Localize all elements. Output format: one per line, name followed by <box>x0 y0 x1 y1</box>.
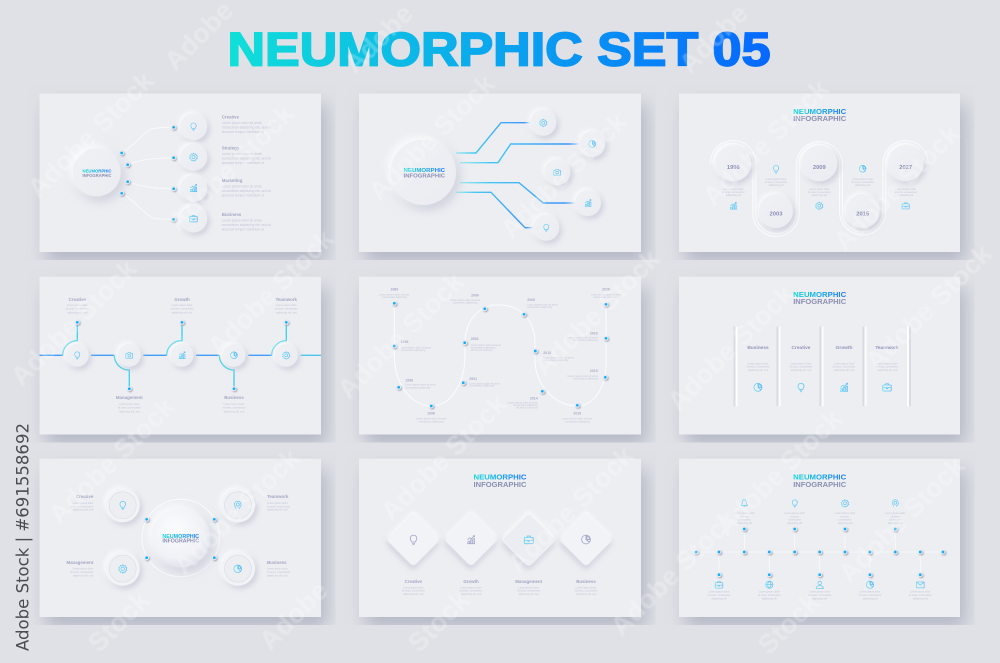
connector lines <box>122 127 174 219</box>
year labels: 1989 <box>390 288 398 292</box>
year circle 2009 <box>801 145 837 181</box>
year labels: Lorem ipsum dolor sit amet <box>568 375 598 378</box>
year labels: 2026 <box>602 288 610 292</box>
top captions: adipiscing elit <box>837 522 853 525</box>
captions and icons: adipiscing elit <box>812 194 827 197</box>
text: Creative <box>70 494 94 512</box>
year labels: Lorem ipsum dolor sit amet <box>591 293 621 296</box>
captions and icons: Lorem ipsum dolor <box>723 188 744 191</box>
column: Growth: adipiscing elit, sed <box>834 369 855 372</box>
text: Management: Lorem ipsum dolor <box>73 568 93 571</box>
text: Management: sit amet, consectetur <box>70 571 93 574</box>
text: Business: Business <box>224 395 244 400</box>
text: Management: adipiscing elit, sed <box>73 575 94 578</box>
year circle 2015 <box>846 194 880 228</box>
bottom captions: sit amet, consectetur <box>758 594 781 597</box>
bottom captions: sit amet, consectetur <box>858 594 882 597</box>
year labels: Lorem ipsum dolor sit amet <box>450 299 480 302</box>
text: Business: consectetur adipiscing elit, sed do <box>222 223 271 227</box>
icon circles <box>180 113 207 232</box>
timeline line <box>40 322 321 389</box>
year labels: 2019 <box>590 369 598 373</box>
text: Teamwork: adipiscing elit, sed <box>276 311 297 314</box>
icon circles <box>66 344 298 367</box>
year labels: 2006 <box>527 298 535 302</box>
year labels: consectetur adipiscing <box>594 296 619 299</box>
captions and icons: sit amet, consectetur <box>851 181 874 184</box>
top captions: sit amet, <box>891 515 900 518</box>
year labels: 2003 <box>471 337 479 341</box>
year circle 2027: 2027 <box>899 165 912 171</box>
text: Teamwork <box>275 297 298 314</box>
year circle 2015: 2015 <box>856 211 870 217</box>
column: Growth <box>832 345 856 391</box>
text: Creative: Creative <box>76 494 94 499</box>
top captions: Lorem ipsum dolor <box>835 512 856 515</box>
central circle: INFOGRAPHIC <box>82 173 112 178</box>
panel heading: NEUMORPHIC <box>474 473 527 482</box>
text: Business: Business <box>267 560 287 565</box>
bottom captions <box>707 591 932 600</box>
bottom icons <box>715 581 924 589</box>
text: Creative: sit amet, consectetur <box>66 308 89 311</box>
text: Growth: Lorem ipsum dolor <box>172 304 193 307</box>
text: Creative: consectetur adipiscing elit, sed do <box>222 126 271 130</box>
watermarks: Adobe Stock <box>697 73 835 212</box>
text: Strategy: eiusmod tempor incididunt ut <box>222 161 264 165</box>
panel heading: INFOGRAPHIC <box>474 480 527 489</box>
column: Growth: Lorem ipsum dolor <box>834 362 855 365</box>
bottom captions: sit amet, consectetur <box>808 594 831 597</box>
year labels: 2019 <box>590 332 598 336</box>
text: Teamwork: sit amet, consectetur <box>267 505 290 508</box>
path dots <box>392 301 608 408</box>
watermarks: Adobe <box>338 0 419 79</box>
watermarks: Adobe Stock <box>528 243 666 382</box>
diamond: Growth: adipiscing elit, sed <box>461 593 482 596</box>
panel heading: NEUMORPHIC <box>793 290 847 299</box>
text: Business: Lorem ipsum dolor sit amet, <box>222 218 262 222</box>
diamond: Business: Business <box>576 579 596 584</box>
watermarks: Adobe Stock <box>332 266 470 405</box>
text: Business <box>222 212 271 232</box>
year labels: 2000 <box>471 294 479 298</box>
column: Business: Lorem ipsum dolor <box>748 362 769 365</box>
text: Business: Lorem ipsum dolor <box>224 403 245 406</box>
panel: four diamonds <box>359 459 641 617</box>
end dots <box>75 320 289 391</box>
text: Strategy: Lorem ipsum dolor sit amet, <box>222 152 262 156</box>
watermarks: Adobe Stock <box>162 98 300 237</box>
text: Strategy: consectetur adipiscing elit, sed do <box>222 156 271 160</box>
captions and icons: adipiscing elit <box>855 184 871 187</box>
year labels: elit sed do eiusmod <box>471 349 493 352</box>
bottom captions: sit amet, consectetur <box>707 594 731 597</box>
central circle: INFOGRAPHIC <box>404 174 446 180</box>
captions and icons: adipiscing elit <box>898 194 914 197</box>
watermarks: Adobe Stock <box>662 278 800 417</box>
diamond: Business: sit amet, consectetur <box>574 590 598 593</box>
text: Teamwork: Lorem ipsum dolor <box>267 502 288 505</box>
top captions: adipiscing elit <box>737 522 752 525</box>
year labels: consectetur adipiscing <box>469 385 495 388</box>
wave track <box>712 142 927 235</box>
year labels: consectetur adipiscing <box>453 301 478 304</box>
text: Business <box>222 395 246 413</box>
year labels: consectetur adipiscing <box>419 420 444 423</box>
panel: horizontal timeline with arcs <box>40 277 321 434</box>
year labels: consectetur adipiscing <box>543 359 569 362</box>
diamond: Creative <box>386 513 440 596</box>
column: Creative: adipiscing elit, sed <box>791 369 812 372</box>
text: Business: Lorem ipsum dolor <box>267 568 288 571</box>
column: Teamwork: Lorem ipsum dolor <box>877 362 898 365</box>
diamond: Growth: sit amet, consectetur <box>459 590 483 593</box>
captions and icons: Lorem ipsum dolor <box>766 178 787 181</box>
top captions: sit amet, <box>740 515 749 518</box>
diamond: Growth: Lorem ipsum dolor <box>461 587 482 590</box>
year labels: Lorem ipsum dolor sit amet <box>471 344 501 347</box>
top captions: consectetur <box>738 519 751 522</box>
text: Management: adipiscing elit, sed <box>119 410 140 413</box>
year labels: elit sed do eiusmod <box>516 407 538 410</box>
diamond: Creative: sit amet, consectetur <box>402 590 425 593</box>
panel heading: INFOGRAPHIC <box>793 297 847 306</box>
text: Teamwork: sit amet, consectetur <box>275 308 298 311</box>
title: NEUMORPHIC SET 05 <box>228 22 770 76</box>
text: Marketing: eiusmod tempor incididunt ut <box>222 194 264 198</box>
text: Creative: Lorem ipsum dolor <box>67 304 88 307</box>
diamond: Management: adipiscing elit, sed <box>518 593 540 596</box>
diamond: Business: adipiscing elit, sed <box>576 593 597 596</box>
column: Teamwork: sit amet, consectetur <box>875 366 899 369</box>
column: Business <box>746 345 770 391</box>
diamond: Business: Lorem ipsum dolor <box>576 587 597 590</box>
watermarks: Adobe <box>253 575 334 656</box>
top captions: sit amet, <box>840 515 850 518</box>
central circle: NEUMORPHIC <box>404 168 446 174</box>
connector dots <box>119 125 176 222</box>
bottom captions: Lorem ipsum dolor <box>910 591 931 594</box>
panel: branching list with four circles <box>40 94 321 252</box>
year labels: 2016 <box>573 412 581 416</box>
central sphere and ring <box>142 499 219 577</box>
year labels: consectetur adipiscing <box>527 306 553 309</box>
central circle <box>391 140 456 205</box>
captions and icons: sit amet, consectetur <box>808 191 831 194</box>
text: Strategy <box>222 146 271 165</box>
column: Business: sit amet, consectetur <box>746 366 770 369</box>
text: Business <box>267 560 290 578</box>
circuit lines <box>456 123 580 228</box>
year labels: consectetur adipiscing <box>573 339 598 342</box>
text: Business: sit amet, consectetur <box>267 571 290 574</box>
year labels: consectetur adipiscing <box>405 386 431 389</box>
year labels: 1996 <box>405 378 413 382</box>
panel heading: INFOGRAPHIC <box>793 480 847 489</box>
diamond: Management: Management <box>515 579 543 584</box>
text: Business: eiusmod tempor incididunt ut <box>222 228 264 232</box>
text: Creative: adipiscing elit, sed <box>67 311 88 314</box>
central sphere and ring: NEUMORPHIC <box>162 534 199 540</box>
top captions: Lorem ipsum dolor <box>885 512 906 515</box>
top captions <box>734 512 906 525</box>
text: Business: adipiscing elit, sed <box>224 410 245 413</box>
bottom captions: Lorem ipsum dolor <box>860 591 881 594</box>
top icons <box>741 500 898 507</box>
captions and icons: sit amet, consectetur <box>894 191 917 194</box>
year circle 2003: 2003 <box>770 211 783 217</box>
year labels: Lorem ipsum dolor sit amet <box>568 337 598 340</box>
text: Growth: Growth <box>174 297 190 302</box>
text: Strategy: Strategy <box>222 146 240 150</box>
central circle: NEUMORPHIC <box>82 168 112 173</box>
watermarks: Adobe Stock <box>605 503 743 642</box>
diamond: Growth: Growth <box>463 579 479 584</box>
year labels: consectetur adipiscing <box>573 377 598 380</box>
year labels: 1998 <box>427 412 435 416</box>
diamond: Management: sit amet, consectetur <box>517 590 540 593</box>
text: Business: Business <box>222 212 242 217</box>
year labels: Lorem ipsum dolor sit amet <box>469 382 500 385</box>
text: Teamwork: Lorem ipsum dolor <box>276 304 297 307</box>
watermarks: Adobe Stock <box>22 65 160 204</box>
watermarks: Adobe Stock <box>5 253 143 392</box>
year labels: consectetur adipiscing <box>382 296 407 299</box>
column: Creative <box>789 345 813 392</box>
captions and icons: adipiscing elit <box>768 184 784 187</box>
year circle 1996 <box>715 145 751 181</box>
year circle 2009: 2009 <box>813 165 827 171</box>
panel heading: NEUMORPHIC <box>793 107 847 116</box>
watermarks: Adobe Stock <box>363 68 501 207</box>
watermarks: Adobe Stock <box>502 440 640 579</box>
watermarks: Adobe <box>673 0 754 79</box>
captions and icons: Lorem ipsum dolor <box>852 178 873 181</box>
timeline lines <box>696 529 943 575</box>
panel: serpentine timeline 1989-2026 <box>359 277 641 434</box>
text: Marketing: consectetur adipiscing elit, sed do <box>222 189 271 193</box>
captions and icons: adipiscing elit <box>726 194 741 197</box>
text: Management: Lorem ipsum dolor <box>119 403 140 406</box>
diamond: Business <box>559 513 613 596</box>
top captions: Lorem ipsum dolor <box>734 512 755 515</box>
serpentine path <box>394 303 606 406</box>
panel: wave timeline 1996-2027 <box>679 94 960 252</box>
year labels: 2014 <box>530 396 538 400</box>
year labels: consectetur adipiscing <box>401 349 426 352</box>
text: Marketing <box>222 178 271 198</box>
bottom captions: adipiscing elit <box>862 597 878 600</box>
panel heading <box>793 290 847 306</box>
captions and icons: Lorem ipsum dolor <box>895 188 916 191</box>
watermarks: Adobe Stock <box>202 223 340 362</box>
watermarks: Adobe Stock <box>375 388 513 527</box>
text: Creative: sit amet, consectetur <box>70 505 93 508</box>
year labels: Lorem ipsum dolor sit amet <box>401 346 431 349</box>
watermarks: Adobe Stock <box>860 238 998 377</box>
top captions: Lorem ipsum dolor <box>784 512 805 515</box>
captions and icons: Lorem ipsum dolor <box>809 188 830 191</box>
year labels: Lorem ipsum dolor sit amet <box>405 384 436 387</box>
bottom captions: Lorem ipsum dolor <box>809 591 830 594</box>
panel: dotted branching timeline <box>679 459 960 617</box>
column: Teamwork <box>875 345 899 391</box>
panel heading <box>793 473 847 489</box>
text: Management: sit amet, consectetur <box>118 407 141 410</box>
year labels: consectetur adipiscing <box>471 346 496 349</box>
top captions: consectetur <box>839 519 852 522</box>
panel: central sphere with four rings <box>40 459 321 617</box>
text: Teamwork <box>267 494 290 512</box>
year circle 1996: 1996 <box>727 165 741 171</box>
text: Creative: Lorem ipsum dolor sit amet, <box>222 121 262 125</box>
panel heading <box>474 473 527 489</box>
year circle 2027 <box>888 145 924 181</box>
year labels: Lorem ipsum dolor sit amet <box>416 418 446 421</box>
timeline dots <box>694 526 946 577</box>
column: Growth: Growth <box>836 345 852 351</box>
text: Management <box>116 395 143 413</box>
central circle <box>73 148 121 196</box>
diamond: Management: Lorem ipsum dolor <box>518 587 539 590</box>
text: Growth: sit amet, consectetur <box>170 308 194 311</box>
text: Teamwork: adipiscing elit, sed <box>267 508 288 512</box>
text: Creative <box>66 297 89 314</box>
year labels: consectetur adipiscing <box>513 404 538 407</box>
watermarks: Adobe Stock <box>710 403 848 542</box>
column: Creative: Lorem ipsum dolor <box>791 362 812 365</box>
bottom captions: adipiscing elit <box>913 597 928 600</box>
column separators <box>734 327 911 406</box>
captions and icons: sit amet, consectetur <box>764 181 788 184</box>
column: Creative: Creative <box>792 345 811 351</box>
icon rings <box>106 488 255 586</box>
watermarks: Adobe Stock <box>43 391 181 530</box>
panel heading: NEUMORPHIC <box>793 473 847 482</box>
bottom captions: adipiscing elit <box>812 597 828 600</box>
year labels <box>379 288 621 423</box>
watermarks: Stock <box>82 584 156 658</box>
captions and icons: sit amet, consectetur <box>722 191 745 194</box>
top captions: consectetur <box>788 519 801 522</box>
icon circles <box>530 110 605 241</box>
text: Growth: adipiscing elit, sed <box>172 311 193 314</box>
text: Business: adipiscing elit, sed <box>267 575 288 578</box>
text: Creative <box>222 114 271 134</box>
text: Management <box>66 560 94 578</box>
year labels: Lorem ipsum dolor sit amet <box>543 356 574 360</box>
stock ID sidebar text: Adobe Stock | #691558692 <box>14 423 32 651</box>
diamond: Creative: adipiscing elit, sed <box>403 593 424 596</box>
year labels: 1992 <box>401 340 409 344</box>
diamond: Creative: Lorem ipsum dolor <box>403 587 424 590</box>
watermarks: Stock <box>402 584 476 658</box>
watermarks: Adobe Stock <box>833 450 971 589</box>
year labels: Lorem ipsum dolor sit amet <box>562 418 593 421</box>
text: Creative: Creative <box>222 114 240 120</box>
text: Marketing: Lorem ipsum dolor sit amet, <box>222 184 262 188</box>
text: Growth <box>170 297 194 314</box>
year labels: Lorem ipsum dolor sit amet <box>379 293 410 296</box>
watermarks: Stock <box>752 586 826 660</box>
panel heading <box>793 107 847 123</box>
text: Management: Management <box>66 560 94 565</box>
column: Teamwork: adipiscing elit, sed <box>877 369 898 372</box>
central sphere and ring: INFOGRAPHIC <box>162 539 199 545</box>
top captions: sit amet, <box>790 515 800 518</box>
watermarks: Adobe Stock <box>495 106 633 245</box>
panel: four columns <box>679 277 960 434</box>
diamond: Management <box>502 513 556 596</box>
year labels: 2013 <box>543 351 551 355</box>
bottom captions: Lorem ipsum dolor <box>709 591 730 594</box>
column: Teamwork: Teamwork <box>875 345 899 351</box>
top captions: adipiscing elit <box>888 522 903 525</box>
bottom captions: sit amet, consectetur <box>909 594 932 597</box>
bottom captions: Lorem ipsum dolor <box>759 591 780 594</box>
diamond: Growth <box>444 513 498 596</box>
connector dots <box>144 517 217 560</box>
text: Teamwork: Teamwork <box>267 494 289 499</box>
year labels: Lorem ipsum dolor sit amet <box>527 304 558 306</box>
column: Growth: sit amet, consectetur <box>832 366 856 369</box>
year labels: consectetur adipiscing <box>565 420 590 423</box>
panel: blue circuit lines <box>359 94 641 252</box>
diamond: Creative: Creative <box>405 579 423 584</box>
watermarks: Adobe Stock <box>828 118 966 257</box>
text: Creative: Creative <box>69 297 87 302</box>
column: Creative: sit amet, consectetur <box>789 366 813 369</box>
year circle 2003 <box>759 194 793 228</box>
captions and icons <box>722 165 917 210</box>
text: Creative: Lorem ipsum dolor <box>73 502 93 505</box>
panel heading: INFOGRAPHIC <box>793 114 847 123</box>
top captions: adipiscing elit <box>787 522 803 525</box>
bottom captions: adipiscing elit <box>711 597 727 600</box>
column: Business: Business <box>747 345 769 351</box>
text: Creative: eiusmod tempor incididunt ut <box>222 130 264 134</box>
year labels: Lorem ipsum dolor sit amet <box>508 402 538 405</box>
text: Teamwork: Teamwork <box>276 297 298 302</box>
text: Business: sit amet, consectetur <box>222 407 246 410</box>
top captions: consectetur <box>889 519 902 522</box>
text: Management: Management <box>116 395 143 400</box>
watermarks: Adobe Stock <box>168 442 306 581</box>
text: Marketing: Marketing <box>222 178 243 183</box>
bottom captions: adipiscing elit <box>762 597 777 600</box>
column: Business: adipiscing elit, sed <box>748 369 769 372</box>
year labels: 2001 <box>469 377 477 381</box>
text: Creative: adipiscing elit, sed <box>73 508 94 512</box>
